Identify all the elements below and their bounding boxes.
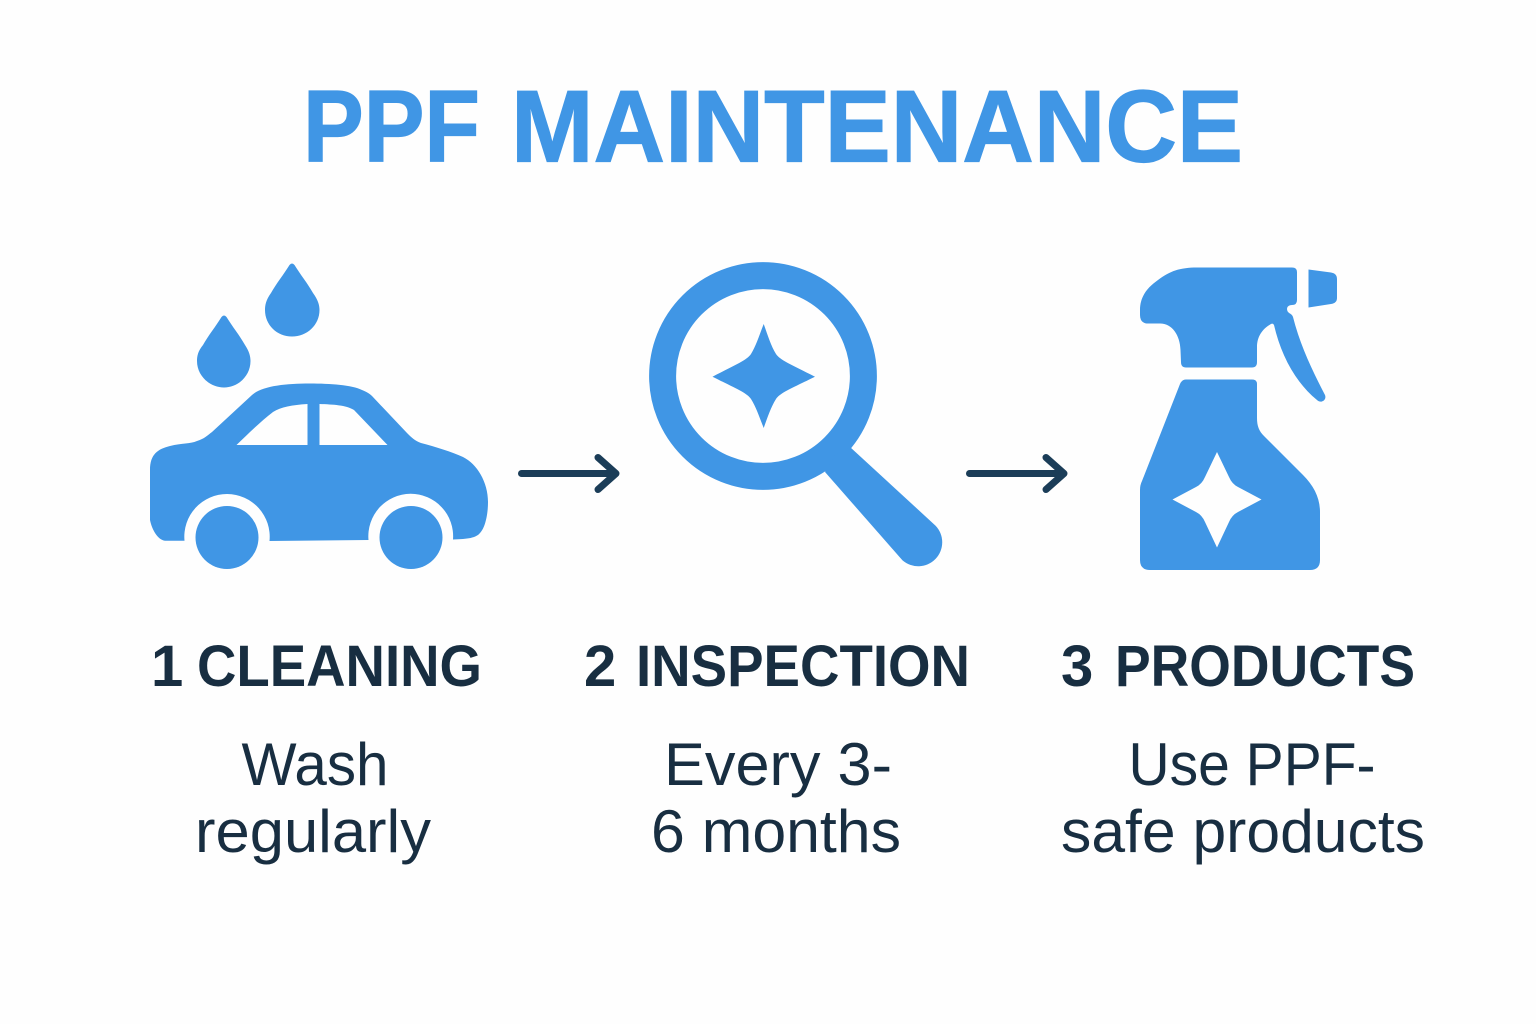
step 2 heading: INSPECTION xyxy=(636,634,970,699)
arrow: cleaning to inspection xyxy=(522,458,616,490)
step 3 description: safe products xyxy=(1061,798,1425,865)
step 2 description: 6 months xyxy=(651,798,901,865)
step 1 description: regularly xyxy=(195,798,431,865)
title: MAINTENANCE xyxy=(511,70,1243,184)
icon: spray bottle with sparkle xyxy=(1140,268,1337,570)
step 1 heading: CLEANING xyxy=(197,634,482,699)
step 3 heading: 3 xyxy=(1061,634,1093,699)
step 3 description xyxy=(1061,731,1425,865)
step 3 description: Use PPF- xyxy=(1128,731,1376,798)
step 1 description xyxy=(195,731,431,865)
step 2 heading: 2 xyxy=(584,634,616,699)
icon: magnifying glass with sparkle xyxy=(663,276,942,566)
step 2 description xyxy=(651,731,901,865)
title: PPF xyxy=(303,70,480,184)
icon: car with water drops xyxy=(150,264,488,569)
step 3 heading: PRODUCTS xyxy=(1115,634,1415,699)
step 2 description: Every 3- xyxy=(664,731,892,798)
arrow: inspection to products xyxy=(970,458,1064,490)
step 1 heading: 1 xyxy=(151,634,183,699)
step 1 description: Wash xyxy=(242,731,388,798)
